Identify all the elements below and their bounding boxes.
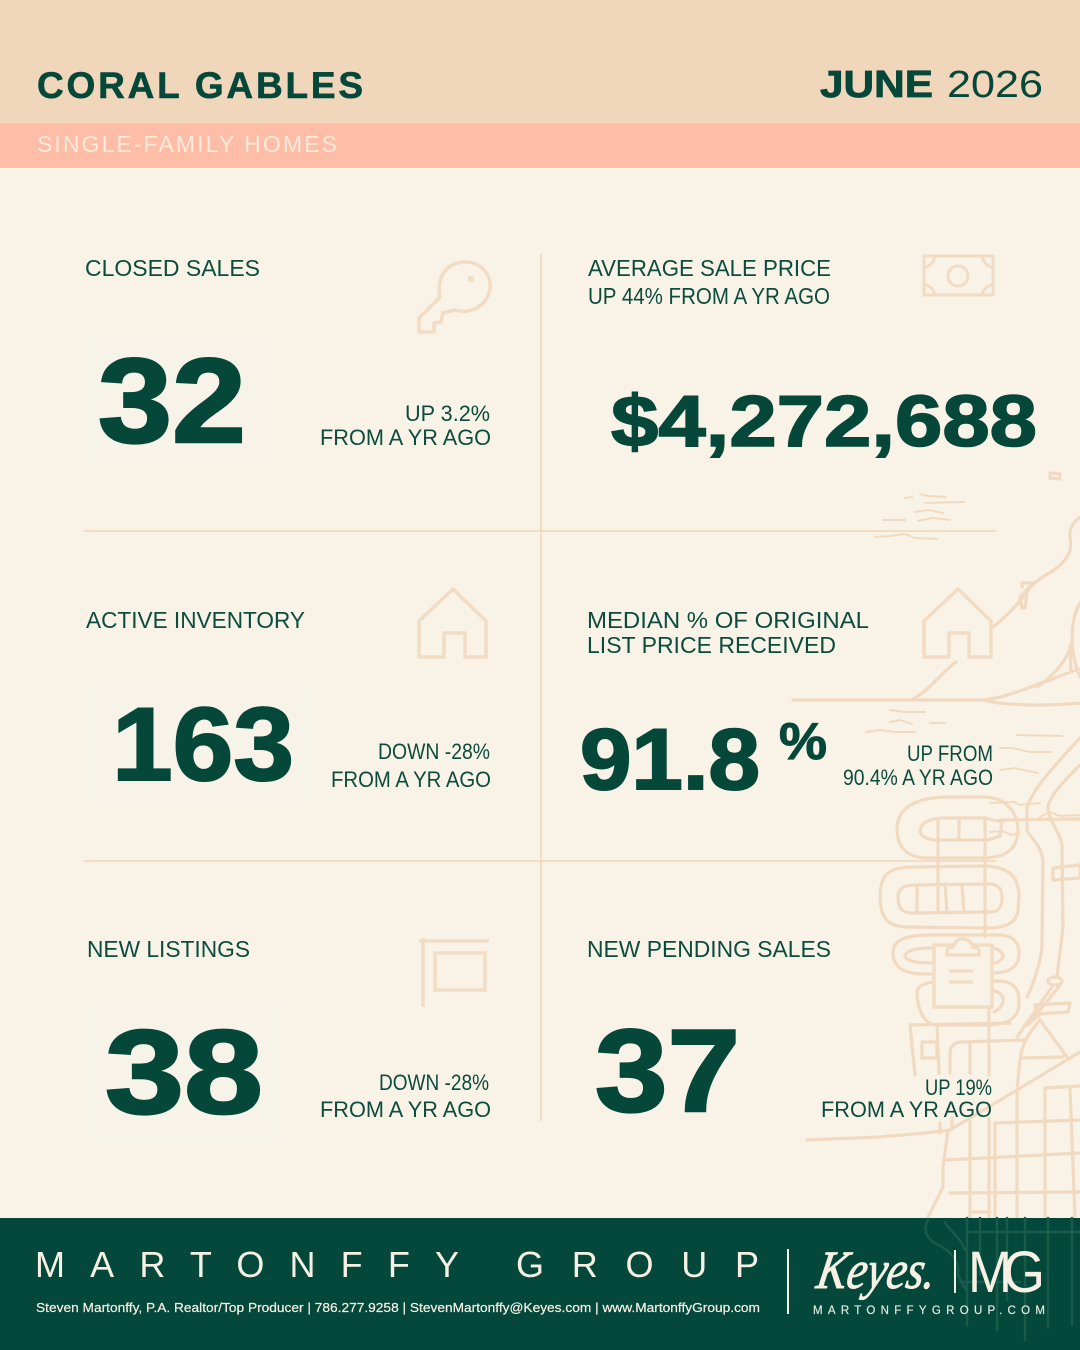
brand name: MARTONFFY (35, 1244, 459, 1285)
subtitle: SINGLE-FAMILY HOMES (37, 131, 337, 157)
change (821, 1075, 992, 1122)
change: UP 19% (925, 1075, 992, 1100)
change: 90.4% A YR AGO (843, 765, 993, 790)
lobes (897, 797, 1018, 858)
change: DOWN -28% (378, 739, 490, 764)
panel: active inventory (85, 589, 491, 805)
value: 91.8 (580, 712, 760, 808)
heading: NEW LISTINGS (87, 936, 250, 962)
change (843, 741, 993, 790)
brand name (35, 1244, 759, 1285)
website: MARTONFFYGROUP.COM (813, 1305, 1045, 1317)
change (320, 1070, 491, 1122)
logo: MG (968, 1240, 1045, 1305)
map in footer (926, 1218, 1080, 1340)
change: FROM A YR AGO (821, 1097, 992, 1122)
value: 163 (112, 687, 294, 803)
change: FROM A YR AGO (320, 425, 491, 450)
heading: LIST PRICE RECEIVED (587, 632, 836, 658)
heading: MEDIAN % OF ORIGINAL (587, 607, 869, 633)
icon: clipboard (934, 939, 992, 1007)
value: 32 (98, 334, 246, 468)
value: 38 (105, 1006, 263, 1139)
icon: house (924, 589, 991, 657)
icon: for sale sign (419, 938, 489, 1007)
panel: median percent of original list price (580, 589, 993, 808)
value: 37 (595, 1005, 740, 1136)
heading: NEW PENDING SALES (587, 936, 831, 962)
logo: Keyes: Keyes. (812, 1240, 941, 1300)
dividers (84, 254, 996, 1121)
date: JUNE (820, 64, 933, 106)
title: CORAL GABLES (37, 65, 363, 106)
value: $4,272,688 (611, 382, 1037, 462)
date: 2026 (947, 64, 1043, 106)
logo: MG: G (1003, 1240, 1045, 1305)
icon: banknote (924, 256, 993, 295)
date (820, 64, 1043, 106)
icon: house (419, 589, 486, 657)
footer (0, 1218, 1080, 1350)
heading (587, 607, 869, 658)
panel: new listings (85, 936, 491, 1145)
change: FROM A YR AGO (331, 767, 491, 792)
panel: closed sales (85, 255, 491, 468)
change: DOWN -28% (379, 1070, 489, 1095)
icon: key (419, 262, 490, 332)
value (580, 712, 827, 808)
lower streets (910, 1023, 1010, 1075)
change: FROM A YR AGO (320, 1097, 491, 1122)
panel: new pending sales (587, 936, 992, 1136)
map illustration background (793, 473, 1080, 1218)
change: UP FROM (907, 741, 993, 766)
logo: MG: M (968, 1240, 1012, 1305)
panel: average sale price (588, 255, 1037, 462)
change (331, 739, 491, 792)
header band (0, 0, 1080, 168)
heading: CLOSED SALES (85, 255, 260, 281)
brand name: GROUP (516, 1244, 759, 1285)
change: UP 44% FROM A YR AGO (588, 283, 830, 309)
change (320, 401, 491, 450)
value: % (779, 713, 827, 771)
heading: AVERAGE SALE PRICE (588, 255, 831, 281)
contact line: Steven Martonffy, P.A. Realtor/Top Producer | 786.277.9258 | StevenMartonffy@Keyes.com | www.MartonffyGroup.com (36, 1300, 760, 1315)
heading: ACTIVE INVENTORY (86, 607, 305, 633)
change: UP 3.2% (405, 401, 490, 426)
